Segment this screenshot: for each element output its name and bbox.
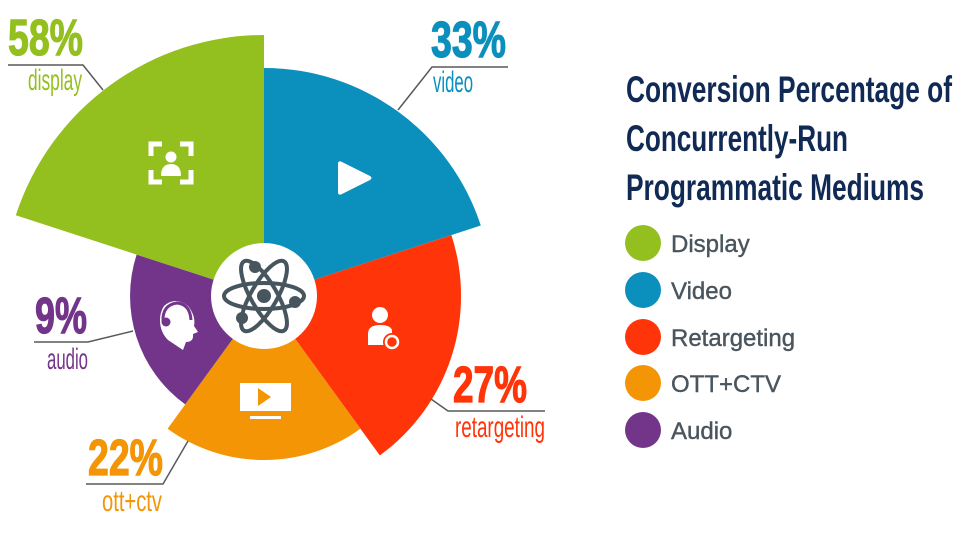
legend: Video bbox=[671, 278, 732, 305]
sector: audio bbox=[130, 255, 264, 404]
icon: audio head bbox=[160, 301, 198, 350]
legend: OTT+CTV bbox=[671, 371, 781, 398]
callout: display bbox=[8, 9, 103, 97]
legend bbox=[625, 225, 795, 448]
callout: ott+ctv: ott+ctv bbox=[102, 485, 162, 518]
title bbox=[626, 69, 952, 208]
title: Concurrently-Run bbox=[626, 118, 848, 159]
sector: display bbox=[16, 35, 264, 296]
legend: Audio bbox=[671, 418, 732, 445]
callout: audio: 9% bbox=[35, 287, 87, 344]
icon: tv bbox=[240, 383, 291, 419]
center circle bbox=[211, 243, 317, 349]
callout: video: 33% bbox=[431, 11, 506, 68]
callout: ott+ctv: 22% bbox=[88, 429, 163, 486]
sector: video bbox=[264, 68, 481, 296]
legend: Retargeting bbox=[671, 325, 795, 352]
callout: ott+ctv bbox=[86, 429, 188, 518]
callout: audio bbox=[34, 287, 133, 376]
icon: atom bbox=[224, 255, 304, 337]
callout: audio: audio bbox=[47, 343, 88, 376]
callout: retargeting: retargeting bbox=[455, 411, 545, 444]
panel: chart bbox=[16, 35, 481, 460]
callout: retargeting bbox=[431, 356, 545, 444]
sector: retargeting bbox=[264, 235, 461, 455]
icon: display bbox=[151, 144, 191, 182]
icon: play bbox=[338, 161, 372, 195]
callout: display: 58% bbox=[8, 9, 83, 66]
callout: video bbox=[398, 11, 508, 110]
legend: Display bbox=[671, 231, 750, 258]
sector: ott+ctv bbox=[168, 296, 360, 460]
callout: retargeting: 27% bbox=[453, 356, 527, 413]
icon: retargeting user bbox=[368, 307, 401, 351]
callout: video: video bbox=[433, 66, 473, 99]
callout: display: display bbox=[28, 64, 82, 97]
